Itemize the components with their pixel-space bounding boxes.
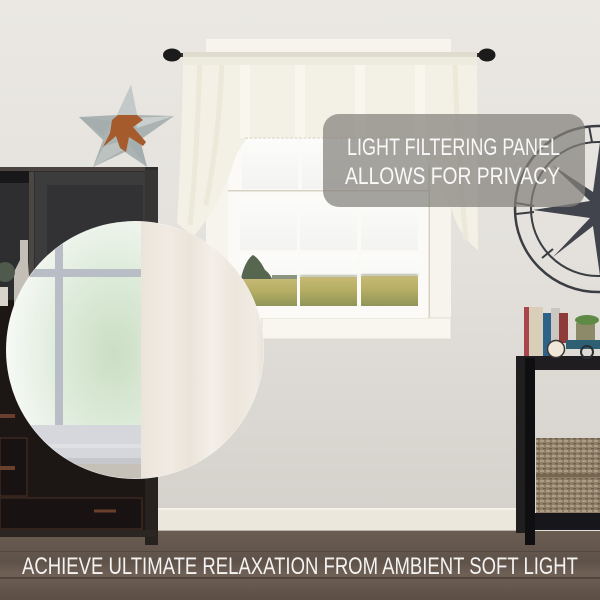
star rust center (103, 115, 146, 152)
window (206, 39, 451, 339)
window trim (206, 39, 451, 339)
table top (516, 356, 600, 370)
console table (516, 356, 600, 545)
left finial (163, 48, 181, 62)
right finial (478, 48, 496, 62)
books (524, 307, 529, 356)
curtain rod (163, 48, 496, 62)
table back leg (516, 366, 525, 533)
table front leg (525, 358, 535, 545)
vase and plant on cabinet (0, 240, 30, 306)
decorative barn star (79, 85, 174, 167)
plant (576, 323, 595, 340)
magnified window sill (31, 425, 141, 458)
side handles (0, 416, 15, 468)
clock (548, 340, 564, 358)
books and ornaments (524, 307, 600, 358)
lower shelf (535, 513, 600, 530)
cabinet door (35, 172, 145, 322)
wicker basket (536, 438, 600, 513)
dark cabinet (0, 167, 158, 545)
wood floor (0, 531, 600, 600)
cabinet base (0, 300, 158, 532)
baseboard (150, 508, 520, 532)
compass star (533, 142, 600, 276)
magnified mullions (55, 244, 63, 425)
compass wall decor (515, 126, 600, 292)
toy truck (566, 340, 600, 349)
drawer handle (94, 510, 116, 512)
magnified window view (28, 225, 141, 425)
magnified curtain fabric (141, 222, 264, 478)
window sash (228, 130, 430, 318)
magnifier circle (0, 215, 271, 485)
sheer swag curtain (177, 52, 478, 250)
caption panel (323, 114, 585, 207)
window panes (240, 138, 418, 306)
